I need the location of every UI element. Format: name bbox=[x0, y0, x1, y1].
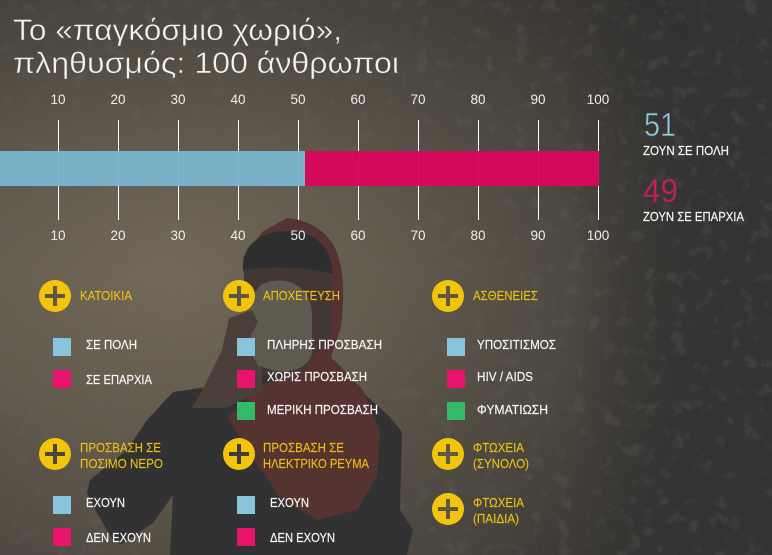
body and arm bbox=[87, 372, 413, 555]
legend: do not have: ΔΕΝ ΕΧΟΥΝ bbox=[270, 530, 335, 545]
heading: (ΣΥΝΟΛΟ) bbox=[473, 456, 529, 471]
stat: 49 live in the countryside: ΖΟΥΝ ΣΕ ΕΠΑΡΧΙΑ bbox=[643, 209, 744, 224]
heading: ΦΤΩΧΕΙΑ bbox=[473, 440, 524, 455]
legend: tuberculosis: ΦΥΜΑΤΙΩΣΗ bbox=[477, 402, 548, 417]
bar segment: 49 rural bbox=[305, 151, 599, 186]
bottom axis labels: 30 bbox=[170, 228, 186, 243]
stat: 51 live in cities: 51 bbox=[644, 106, 676, 143]
legend: full access: ΠΛΗΡΗΣ ΠΡΟΣΒΑΣΗ bbox=[267, 337, 382, 352]
bar chart: urban vs rural population bbox=[0, 92, 609, 243]
top axis labels: 90 bbox=[530, 92, 546, 107]
heading: ΠΡΟΣΒΑΣΗ ΣΕ bbox=[80, 440, 161, 455]
legend: have: ΕΧΟΥΝ bbox=[270, 495, 309, 510]
heading: ΑΠΟΧΕΤΕΥΣΗ bbox=[263, 288, 340, 303]
legend: partial access: ΜΕΡΙΚΗ ΠΡΟΣΒΑΣΗ bbox=[267, 402, 378, 417]
legend: malnutrition: ΥΠΟΣΙΤΙΣΜΟΣ bbox=[477, 337, 556, 352]
top axis labels: 80 bbox=[470, 92, 486, 107]
title: Το «παγκόσμιο χωριό», bbox=[13, 14, 342, 47]
stat: 49 live in the countryside bbox=[643, 172, 744, 224]
heading bbox=[80, 440, 163, 471]
icon: plus button bbox=[223, 438, 255, 470]
hand and forearm bbox=[192, 310, 262, 408]
legend: full access bbox=[237, 337, 382, 356]
heading: ΑΣΘΕΝΕΙΕΣ bbox=[473, 288, 538, 303]
legend: do not have bbox=[237, 528, 335, 546]
icon: plus button bbox=[432, 438, 464, 470]
top axis labels: 50 bbox=[290, 92, 306, 107]
bottle bbox=[240, 280, 312, 371]
top axis labels bbox=[50, 92, 609, 107]
bottom axis labels bbox=[50, 228, 609, 243]
panel: housing bbox=[39, 280, 152, 388]
legend: partial access bbox=[237, 402, 378, 420]
legend: in countryside: ΣΕ ΕΠΑΡΧΙΑ bbox=[86, 372, 152, 387]
top axis labels: 60 bbox=[350, 92, 366, 107]
top axis labels: 20 bbox=[110, 92, 126, 107]
heading: ΠΟΣΙΜΟ ΝΕΡΟ bbox=[80, 456, 163, 471]
heading bbox=[473, 495, 524, 526]
bottom axis labels: 100 bbox=[587, 228, 609, 243]
legend: have bbox=[237, 495, 309, 514]
heading: ΗΛΕΚΤΡΙΚΟ ΡΕΥΜΑ bbox=[263, 456, 369, 471]
icon: plus button bbox=[432, 493, 464, 525]
stat: 51 live in cities: ΖΟΥΝ ΣΕ ΠΟΛΗ bbox=[643, 143, 729, 158]
title bbox=[13, 14, 399, 80]
legend: in city: ΣΕ ΠΟΛΗ bbox=[86, 337, 137, 352]
cap bbox=[243, 231, 333, 274]
bar segment: 51 urban bbox=[0, 151, 305, 186]
heading: ΚΑΤΟΙΚΙΑ bbox=[80, 288, 132, 303]
heading: (ΠΑΙΔΙΑ) bbox=[473, 511, 519, 526]
icon: plus button bbox=[223, 280, 255, 312]
legend: have: ΕΧΟΥΝ bbox=[86, 495, 125, 510]
scarf and hood bbox=[228, 218, 380, 520]
stat: 51 live in cities bbox=[643, 106, 729, 158]
legend: HIV / AIDS: HIV / AIDS bbox=[477, 369, 533, 384]
face bbox=[243, 262, 331, 375]
panel: poverty children bbox=[432, 493, 524, 526]
top axis labels: 10 bbox=[50, 92, 66, 107]
legend: no access: ΧΩΡΙΣ ΠΡΟΣΒΑΣΗ bbox=[267, 369, 367, 384]
icon: plus button bbox=[432, 280, 464, 312]
icon: plus button bbox=[39, 280, 71, 312]
bottom axis labels: 70 bbox=[410, 228, 426, 243]
top axis labels: 30 bbox=[170, 92, 186, 107]
heading bbox=[473, 440, 529, 471]
title: πληθυσμός: 100 άνθρωποι bbox=[13, 47, 399, 80]
bottom axis labels: 50 bbox=[290, 228, 306, 243]
bottom axis labels: 90 bbox=[530, 228, 546, 243]
heading bbox=[263, 440, 369, 471]
photo: person drinking from a bottle bbox=[87, 218, 413, 555]
bottom axis labels: 60 bbox=[350, 228, 366, 243]
legend: no access bbox=[237, 369, 367, 388]
bottom axis labels: 10 bbox=[50, 228, 66, 243]
legend: do not have: ΔΕΝ ΕΧΟΥΝ bbox=[86, 530, 151, 545]
stat: 49 live in the countryside: 49 bbox=[643, 172, 678, 209]
tick lines bbox=[58, 120, 598, 220]
bottom axis labels: 20 bbox=[110, 228, 126, 243]
top axis labels: 100 bbox=[587, 92, 609, 107]
top axis labels: 70 bbox=[410, 92, 426, 107]
panel: sanitation bbox=[223, 280, 382, 420]
bottom axis labels: 80 bbox=[470, 228, 486, 243]
bottom axis labels: 40 bbox=[230, 228, 246, 243]
heading: ΦΤΩΧΕΙΑ bbox=[473, 495, 524, 510]
icon: plus button bbox=[39, 438, 71, 470]
panel: diseases bbox=[432, 280, 556, 420]
heading: ΠΡΟΣΒΑΣΗ ΣΕ bbox=[263, 440, 344, 455]
panel: drinking water access bbox=[39, 438, 163, 546]
panel: poverty total bbox=[432, 438, 529, 471]
panel: electricity access bbox=[223, 438, 369, 546]
top axis labels: 40 bbox=[230, 92, 246, 107]
